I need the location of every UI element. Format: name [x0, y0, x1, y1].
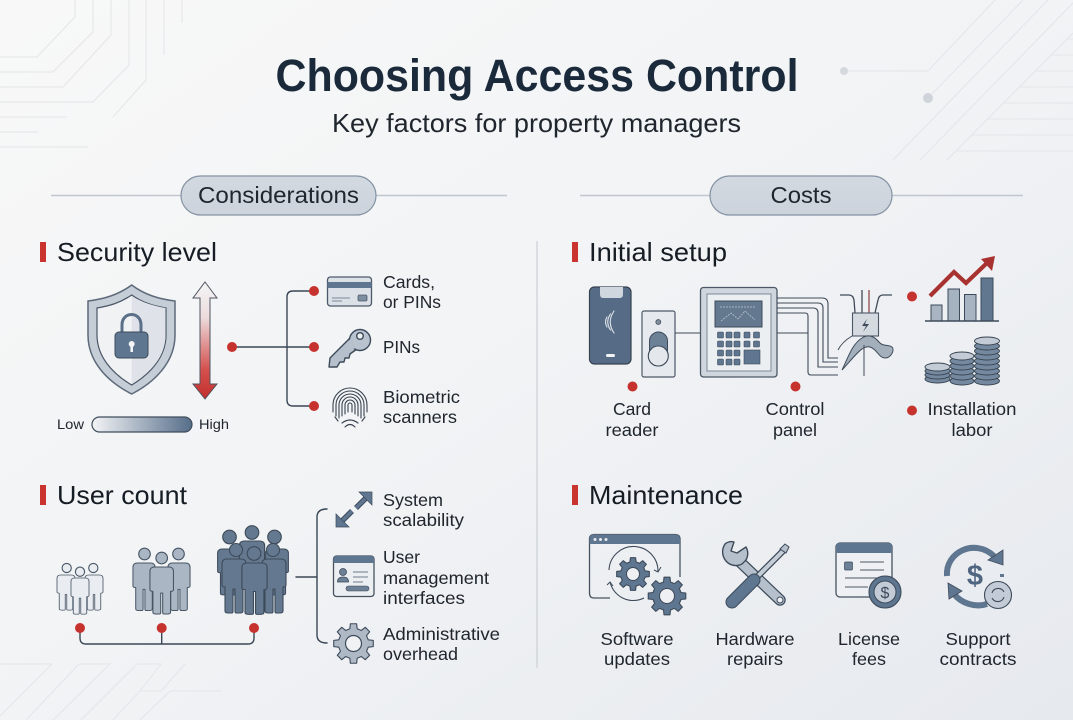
- label: card reader: Card: [613, 399, 651, 419]
- label: card reader: reader: [606, 420, 659, 440]
- low to high scale: Low: [57, 416, 85, 432]
- heading: initial setup: Initial setup: [589, 237, 727, 267]
- label: software updates: [600, 629, 674, 669]
- label: administrative overhead: overhead: [383, 644, 458, 664]
- label: support contracts: [940, 629, 1017, 669]
- icon: scalability arrows: [336, 492, 372, 527]
- section header: Considerations: [51, 176, 507, 215]
- icon: door button: [642, 311, 675, 377]
- label: system scalability: [383, 490, 464, 530]
- bracket: [296, 509, 327, 643]
- icon: large user group: [218, 526, 288, 614]
- panel: security level: [40, 237, 460, 432]
- label: biometric scanners: scanners: [383, 407, 457, 427]
- icon: small user group: [57, 563, 103, 614]
- label: system scalability: System: [383, 490, 443, 510]
- icon: medium user group: [133, 548, 190, 614]
- icon: card: [328, 277, 372, 306]
- panel: initial setup: [572, 237, 1016, 440]
- label: control panel: Control: [766, 399, 824, 419]
- icon: license fee document: $: [881, 585, 890, 602]
- label: administrative overhead: Administrative: [383, 624, 500, 644]
- label: hardware repairs: repairs: [727, 649, 783, 669]
- icon: coin stacks: [925, 337, 1000, 385]
- label: support contracts: Support: [946, 629, 1011, 649]
- label: user management interfaces: [383, 547, 489, 608]
- center divider: [536, 241, 538, 668]
- label: cards: or PINs: [383, 292, 441, 312]
- icon: key: [329, 330, 370, 367]
- label: installation labor: Installation: [928, 399, 1016, 419]
- label: cards: [383, 272, 441, 312]
- arrow: security scale: [193, 282, 217, 399]
- icon: fingerprint: [333, 388, 367, 427]
- label: support contracts: contracts: [940, 649, 1017, 669]
- wiring between devices: [675, 298, 838, 375]
- label: user management interfaces: interfaces: [383, 588, 465, 608]
- label: hardware repairs: Hardware: [716, 629, 794, 649]
- label: license fees: fees: [852, 649, 886, 669]
- low to high scale: High: [199, 416, 229, 432]
- label: system scalability: scalability: [383, 510, 464, 530]
- icon: gear: [334, 624, 373, 663]
- section header: Costs: Costs: [770, 182, 832, 208]
- label: software updates: Software: [600, 629, 674, 649]
- label: biometric scanners: Biometric: [383, 387, 460, 407]
- panel: maintenance: [572, 480, 1017, 669]
- label: cards: Cards,: [383, 272, 435, 292]
- heading: maintenance: Maintenance: [589, 480, 743, 510]
- icon: license fee document: [836, 543, 901, 608]
- label: administrative overhead: [383, 624, 500, 664]
- icon: wrench and screwdriver: [723, 542, 789, 603]
- red nodes: [628, 292, 917, 416]
- section header: Costs: [580, 176, 1023, 215]
- label: biometric scanners: [383, 387, 460, 427]
- label: control panel: panel: [773, 420, 817, 440]
- icon: software updates: [590, 534, 686, 615]
- label: installation labor: labor: [952, 420, 993, 440]
- label: license fees: License: [838, 629, 900, 649]
- connector with red nodes: [75, 623, 259, 644]
- label: hardware repairs: [716, 629, 794, 669]
- panel: user count: [40, 480, 500, 664]
- subtitle: Key factors for property managers: [332, 108, 741, 138]
- icon: support contract cycle: $: [967, 560, 983, 592]
- icon: support contract cycle: [947, 548, 1012, 608]
- label: software updates: updates: [604, 649, 670, 669]
- label: installation labor: [928, 399, 1016, 440]
- icon: user management window: [334, 556, 374, 596]
- icon: shield with padlock: [88, 285, 175, 394]
- label: license fees: [838, 629, 900, 669]
- section header: Considerations: Considerations: [198, 182, 359, 208]
- icon: power junction box: [838, 290, 893, 376]
- heading: user count: User count: [57, 480, 188, 510]
- label: user management interfaces: User: [383, 547, 420, 567]
- label: user management interfaces: management: [383, 568, 489, 588]
- low to high scale: [57, 416, 229, 432]
- label: card reader: [606, 399, 659, 440]
- label: pins: PINs: [383, 337, 420, 357]
- icon: card reader: [590, 287, 631, 364]
- icon: rising cost chart: [925, 256, 999, 321]
- heading: security level: Security level: [57, 237, 217, 267]
- label: control panel: [766, 399, 824, 440]
- icon: control panel: [700, 288, 777, 377]
- connector with red nodes: [227, 286, 319, 411]
- title: Choosing Access Control: [276, 50, 798, 101]
